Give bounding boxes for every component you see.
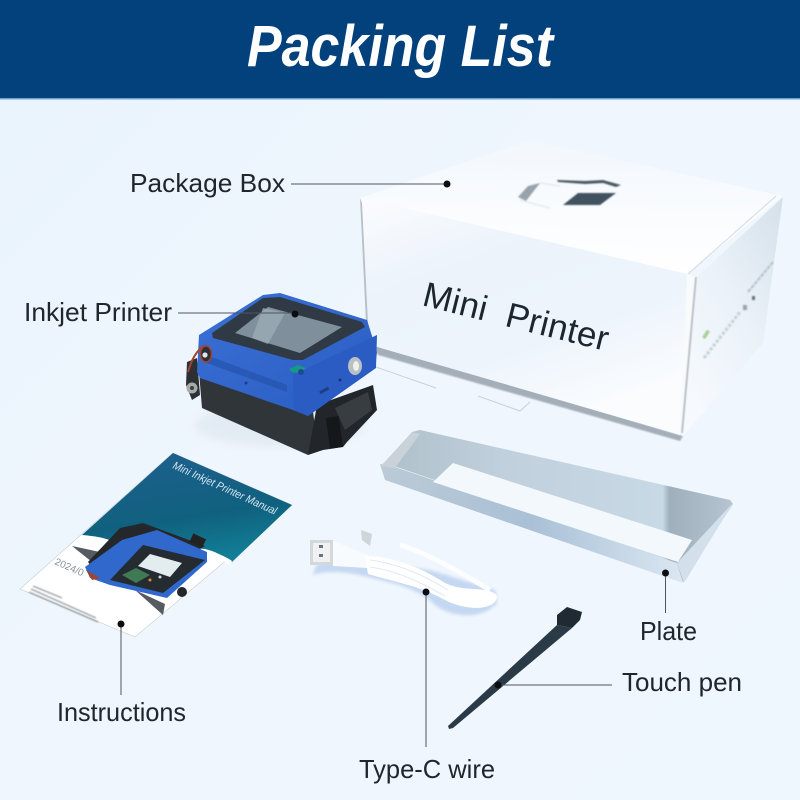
label: package box	[130, 168, 450, 198]
printer screen bezel	[212, 297, 365, 360]
box side print	[702, 262, 773, 358]
box top print	[518, 180, 621, 208]
title: Packing List	[247, 14, 555, 79]
inkjet printer	[186, 293, 377, 455]
printer cable	[188, 346, 204, 372]
manual small print	[29, 586, 98, 622]
touch pen	[448, 607, 582, 729]
label: package box: Package Box	[130, 168, 285, 198]
package box	[360, 140, 783, 441]
box front face	[360, 198, 687, 435]
tray lines under box	[376, 367, 530, 411]
printer rear clip	[186, 358, 200, 400]
plate side edge	[677, 503, 733, 583]
label: type-c wire: Type-C wire	[359, 754, 495, 784]
label: inkjet printer	[24, 297, 298, 327]
title banner	[0, 0, 800, 100]
printer right clip	[308, 385, 377, 455]
manual cover colour	[82, 453, 292, 562]
type-c wire	[310, 530, 497, 615]
label: touch pen	[494, 667, 742, 697]
plate front edge	[380, 464, 683, 583]
plate window	[433, 463, 692, 562]
printer green button	[289, 365, 306, 373]
label: plate: Plate	[640, 616, 697, 646]
manual printer photo	[72, 523, 207, 615]
box text: Mini Printer	[419, 275, 613, 359]
printer screen	[235, 307, 342, 353]
box side face	[681, 197, 783, 436]
instructions manual	[20, 453, 292, 637]
box top	[360, 140, 783, 274]
printer knob	[348, 357, 362, 375]
label: touch pen: Touch pen	[622, 667, 742, 697]
printer blue body	[197, 293, 377, 416]
label: instructions: Instructions	[57, 697, 186, 727]
label: type-c wire	[359, 588, 495, 784]
metal plate	[380, 430, 733, 583]
manual title: Mini Inkjet Printer Manual	[171, 460, 279, 518]
printer black base	[199, 372, 317, 455]
label: plate	[640, 570, 697, 646]
label: inkjet printer: Inkjet Printer	[24, 297, 172, 327]
manual date: 2024/0	[53, 557, 86, 579]
label: instructions	[57, 620, 186, 727]
